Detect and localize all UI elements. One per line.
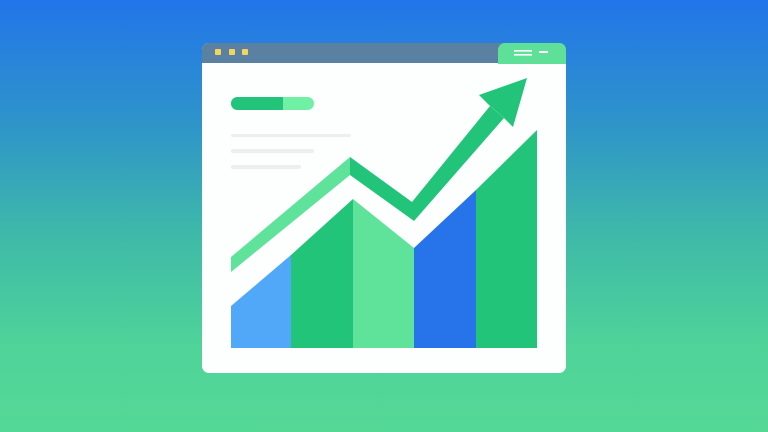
title bar dots <box>215 49 248 55</box>
progress pill <box>231 97 314 110</box>
window panel <box>202 43 566 373</box>
trend arrow <box>231 78 527 272</box>
green tab <box>498 43 566 64</box>
text placeholder lines <box>231 134 351 169</box>
bar chart <box>231 130 537 348</box>
